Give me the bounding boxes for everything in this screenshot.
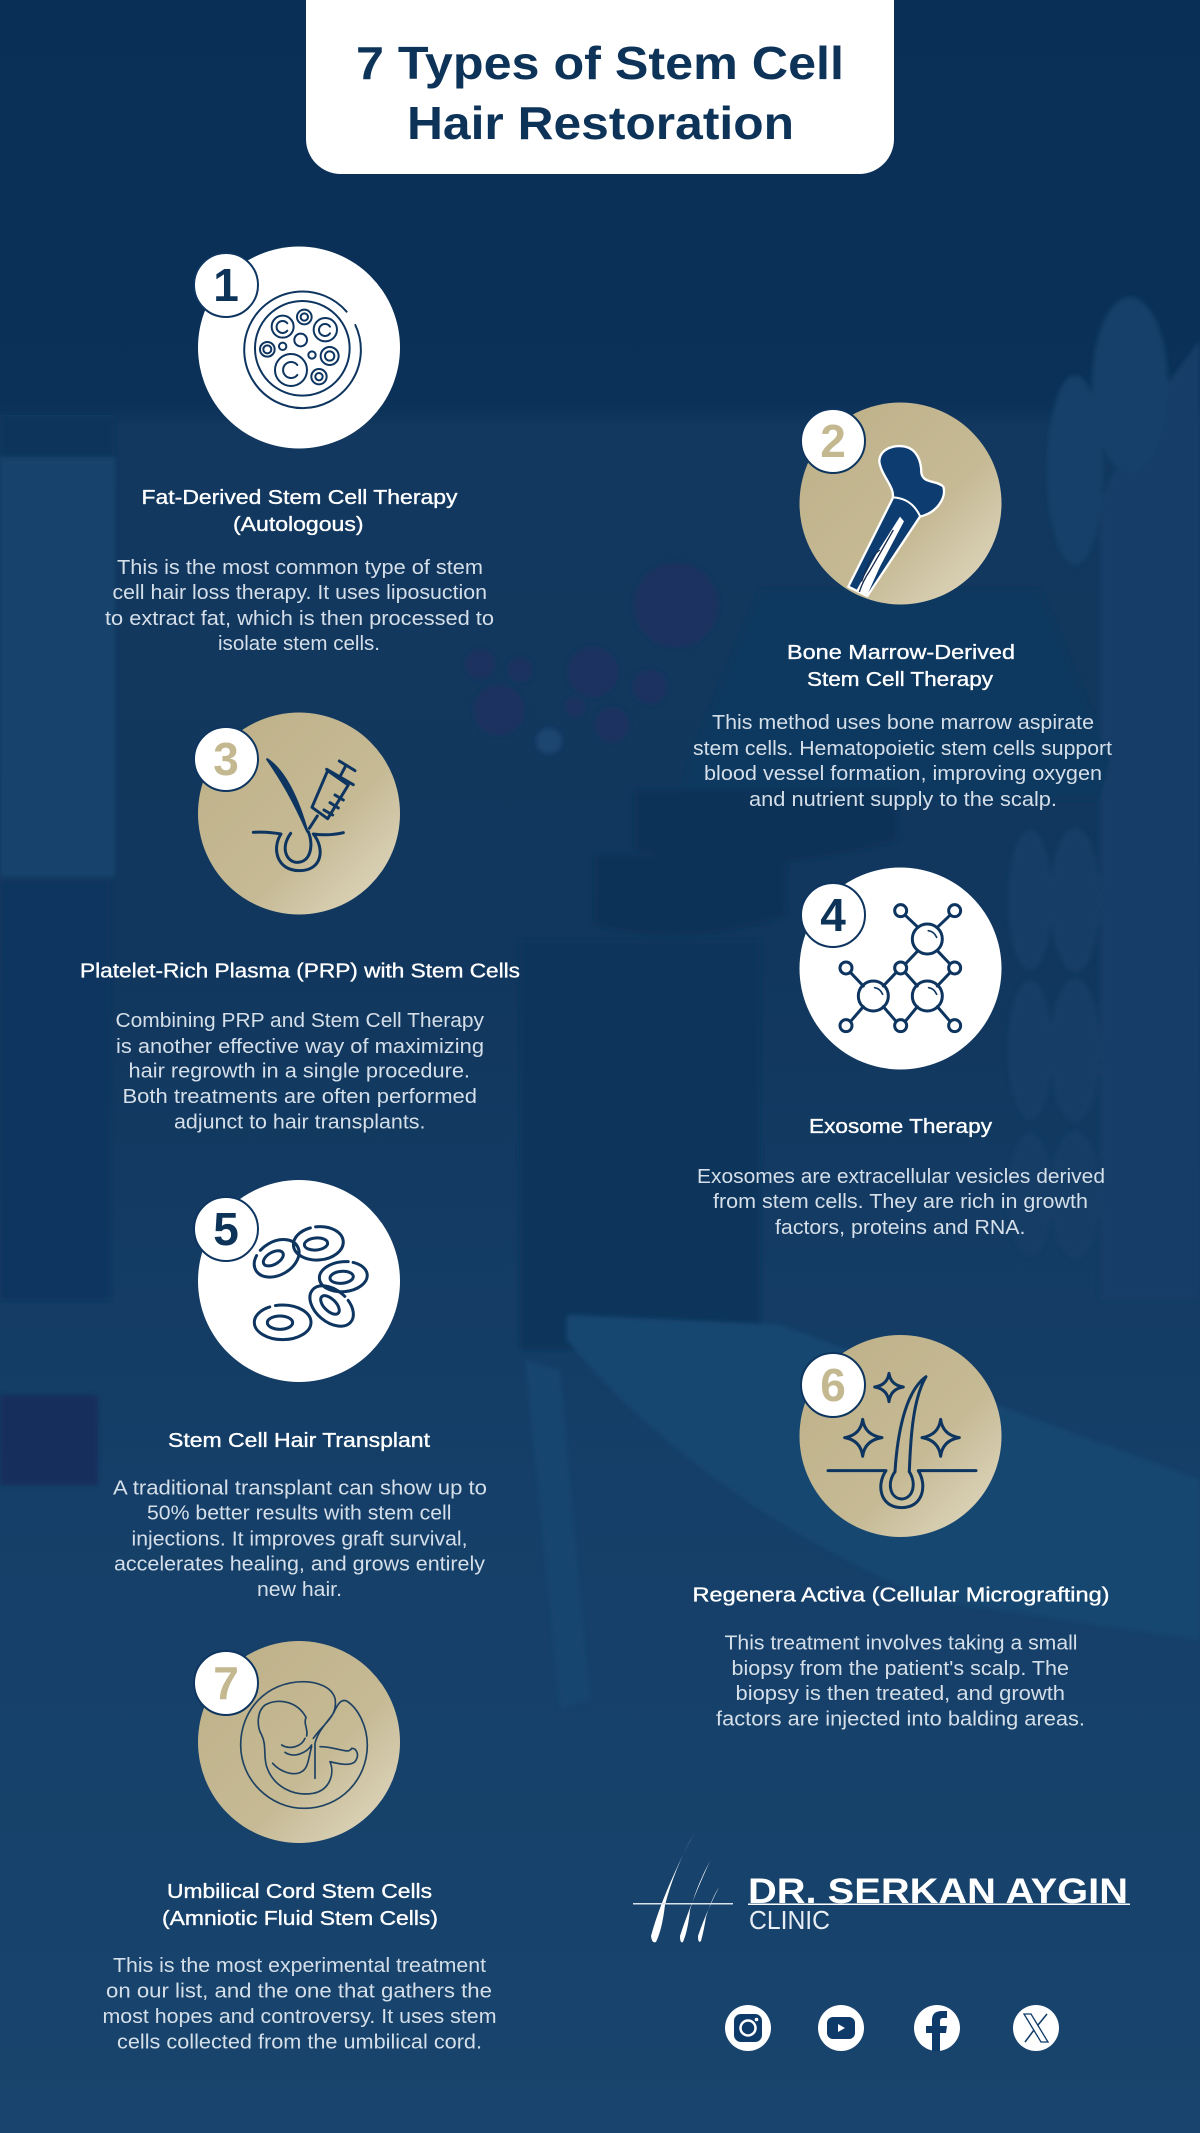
icon: hair follicle with syringe [198, 712, 400, 914]
body text 1: isolate stem cells. [218, 633, 380, 655]
body text 7: most hopes and controversy. It uses stem [102, 2006, 496, 2028]
body text 5: new hair. [257, 1579, 342, 1601]
number badge 2 [801, 409, 865, 473]
number badge 2: 2 [820, 415, 846, 467]
number badge 1 [194, 253, 258, 317]
icon: facebook [914, 2005, 960, 2051]
heading 7: Umbilical Cord Stem Cells [167, 1881, 432, 1903]
body text 4: from stem cells. They are rich in growth [713, 1191, 1088, 1213]
number badge 3 [194, 727, 258, 791]
number badge 7 [194, 1651, 258, 1715]
body text 3 [116, 1010, 484, 1134]
body text 6: biopsy from the patient's scalp. The [732, 1658, 1069, 1680]
body text 7: on our list, and the one that gathers the [106, 1980, 492, 2002]
heading 2 [787, 642, 1015, 691]
body text 3: hair regrowth in a single procedure. [128, 1060, 470, 1082]
logo: Dr. Serkan Aygin Clinic [633, 1833, 1130, 1942]
title card: Hair Restoration [407, 97, 794, 149]
body text 6 [716, 1632, 1085, 1730]
heading 1 [142, 487, 458, 536]
heading 4: Exosome Therapy [809, 1116, 992, 1138]
icon: youtube [818, 2005, 864, 2051]
panel: item 6 regenera activa [692, 1335, 1110, 1730]
logo: Dr. Serkan Aygin Clinic: CLINIC [749, 1905, 830, 1935]
body text 5: A traditional transplant can show up to [113, 1478, 487, 1500]
title card: 7 Types of Stem Cell [356, 37, 844, 89]
body text 2: This method uses bone marrow aspirate [712, 712, 1094, 734]
number badge 3: 3 [213, 733, 239, 785]
panel: item 2 bone marrow [693, 402, 1112, 811]
icon: X [1013, 2005, 1059, 2051]
panel: item 5 hair transplant [113, 1180, 487, 1601]
body text 2: stem cells. Hematopoietic stem cells support [693, 738, 1112, 760]
heading 7 [162, 1881, 438, 1930]
body text 4 [697, 1166, 1105, 1239]
body text 3: is another effective way of maximizing [116, 1036, 484, 1058]
body text 2 [693, 712, 1112, 811]
body text 1: This is the most common type of stem [117, 557, 483, 579]
body text 7 [102, 1955, 496, 2054]
icon: molecule [800, 868, 1002, 1070]
heading 5: Stem Cell Hair Transplant [168, 1430, 430, 1452]
number badge 5: 5 [213, 1203, 239, 1255]
heading 2: Bone Marrow-Derived [787, 642, 1015, 664]
body text 5: injections. It improves graft survival, [132, 1528, 468, 1550]
body text 3: Combining PRP and Stem Cell Therapy [116, 1010, 484, 1032]
icon: stem cell dish [198, 246, 400, 448]
body text 1: to extract fat, which is then processed to [105, 608, 494, 630]
body text 6: biopsy is then treated, and growth [736, 1683, 1065, 1705]
body text 4: Exosomes are extracellular vesicles derived [697, 1166, 1105, 1188]
panel: item 7 umbilical cord [102, 1641, 496, 2054]
icon: bone [800, 402, 1002, 604]
body text 6: factors are injected into balding areas. [716, 1708, 1085, 1730]
panel: item 1 fat-derived [105, 246, 494, 655]
heading 6: Regenera Activa (Cellular Micrografting) [692, 1584, 1110, 1606]
number badge 6: 6 [820, 1359, 846, 1411]
body text 7: cells collected from the umbilical cord. [117, 2032, 482, 2054]
body text 4: factors, proteins and RNA. [775, 1217, 1026, 1239]
body text 2: and nutrient supply to the scalp. [749, 789, 1057, 811]
icon: hair follicle with sparkles [800, 1335, 1002, 1537]
number badge 4: 4 [820, 889, 846, 941]
icon: instagram [725, 2005, 771, 2051]
panel: item 3 PRP [80, 712, 520, 1134]
social icons [725, 2005, 1059, 2051]
body text 7: This is the most experimental treatment [113, 1955, 486, 1977]
heading 2: Stem Cell Therapy [807, 669, 993, 691]
body text 6: This treatment involves taking a small [724, 1632, 1078, 1654]
heading 1: Fat-Derived Stem Cell Therapy [142, 487, 458, 509]
number badge 7: 7 [213, 1657, 239, 1709]
icon: fetus [198, 1641, 400, 1843]
number badge 5 [194, 1197, 258, 1261]
logo: Dr. Serkan Aygin Clinic: DR. SERKAN AYGIN [748, 1872, 1128, 1911]
body text 1 [105, 557, 494, 655]
body text 5 [113, 1478, 487, 1601]
body text 5: accelerates healing, and grows entirely [114, 1554, 485, 1576]
title card [306, 0, 894, 174]
heading 1: (Autologous) [233, 514, 364, 536]
body text 2: blood vessel formation, improving oxygen [704, 763, 1102, 785]
heading 7: (Amniotic Fluid Stem Cells) [162, 1908, 438, 1930]
body text 3: adjunct to hair transplants. [174, 1112, 426, 1134]
icon: cells [198, 1180, 400, 1382]
panel: item 4 exosome [697, 868, 1105, 1239]
body text 5: 50% better results with stem cell [147, 1502, 452, 1524]
number badge 4 [801, 883, 865, 947]
number badge 6 [801, 1353, 865, 1417]
body text 3: Both treatments are often performed [122, 1086, 477, 1108]
body text 1: cell hair loss therapy. It uses liposuction [112, 582, 487, 604]
heading 3: Platelet-Rich Plasma (PRP) with Stem Cells [80, 960, 520, 982]
number badge 1: 1 [213, 259, 239, 311]
